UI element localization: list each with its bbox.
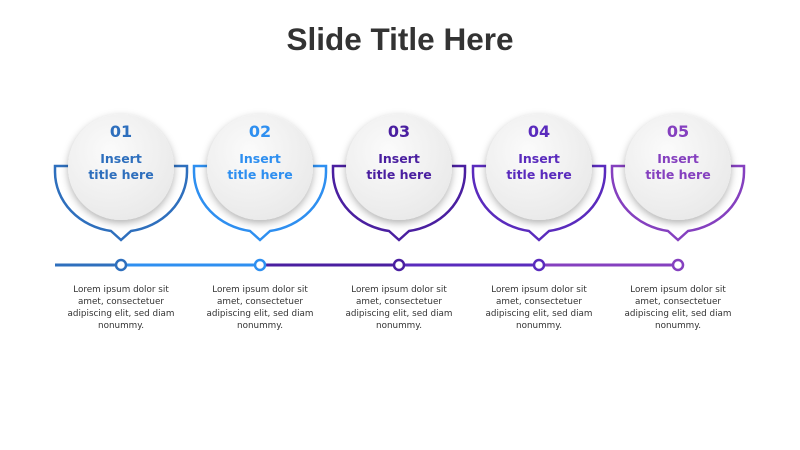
text 1: adipiscing elit, sed diam (68, 309, 174, 319)
step 1: Insert (100, 151, 142, 166)
step 2: title here (227, 167, 293, 182)
text 4: adipiscing elit, sed diam (486, 309, 592, 319)
step 5: Insert (657, 151, 699, 166)
text 4: Lorem ipsum dolor sit (491, 285, 587, 295)
text 2: nonummy. (237, 321, 283, 331)
text 4 (486, 285, 592, 331)
step 3: Insert (378, 151, 420, 166)
step 3: 03 (388, 122, 410, 141)
step 3 (333, 114, 465, 270)
text 1: amet, consectetuer (78, 297, 164, 307)
step 5 (612, 114, 744, 270)
step 4: title here (506, 167, 572, 182)
text 5: adipiscing elit, sed diam (624, 309, 731, 319)
title: Slide Title Here (286, 21, 514, 57)
text 5 (624, 285, 731, 331)
text 3 (346, 285, 452, 331)
step 4: 04 (528, 122, 550, 141)
timeline line (55, 264, 673, 266)
text 2 (206, 285, 313, 331)
text 4: amet, consectetuer (496, 297, 582, 307)
text 1: Lorem ipsum dolor sit (73, 285, 169, 295)
text 2: Lorem ipsum dolor sit (212, 285, 308, 295)
text 5: nonummy. (655, 321, 701, 331)
text 5: amet, consectetuer (635, 297, 721, 307)
text 2: amet, consectetuer (217, 297, 303, 307)
text 1: nonummy. (98, 321, 144, 331)
step 2: Insert (239, 151, 281, 166)
text 1 (68, 285, 174, 331)
step 5: 05 (667, 122, 689, 141)
text 2: adipiscing elit, sed diam (206, 309, 313, 319)
text 3: Lorem ipsum dolor sit (351, 285, 447, 295)
step 1: title here (88, 167, 154, 182)
text 3: nonummy. (376, 321, 422, 331)
text 4: nonummy. (516, 321, 562, 331)
step 3: title here (366, 167, 432, 182)
step 1 (55, 114, 187, 270)
text 5: Lorem ipsum dolor sit (630, 285, 726, 295)
step 4 (473, 114, 605, 270)
step 2: 02 (249, 122, 271, 141)
step 1: 01 (110, 122, 132, 141)
step 5: title here (645, 167, 711, 182)
text 3: adipiscing elit, sed diam (346, 309, 452, 319)
text 3: amet, consectetuer (356, 297, 442, 307)
step 4: Insert (518, 151, 560, 166)
step 2 (194, 114, 326, 270)
